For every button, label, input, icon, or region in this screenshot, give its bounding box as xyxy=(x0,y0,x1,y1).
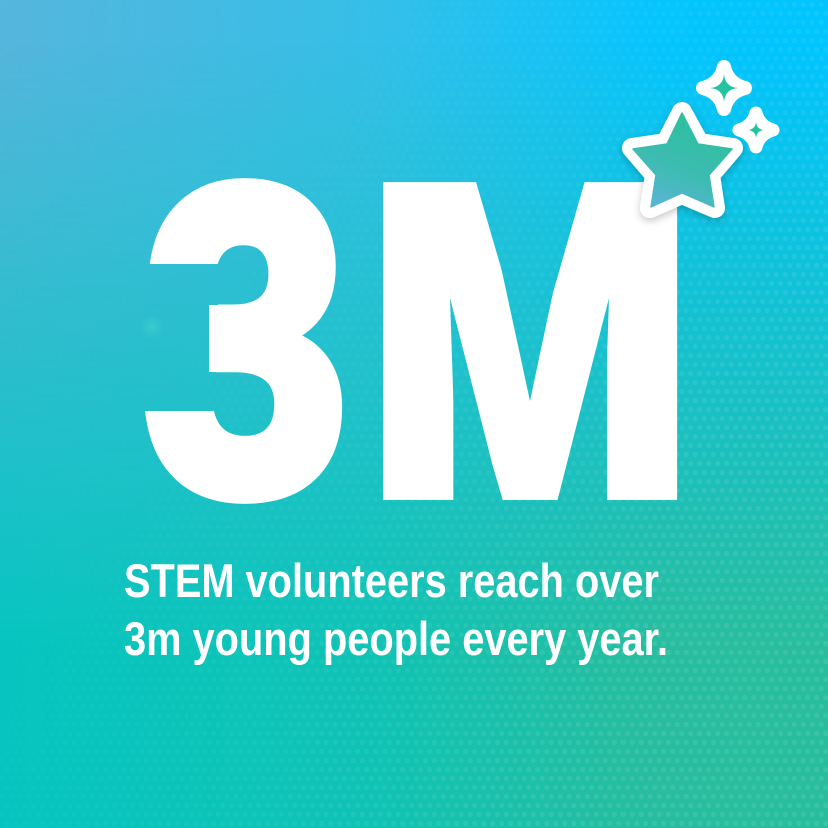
caption line 1: STEM volunteers reach over xyxy=(124,554,659,607)
caption text xyxy=(124,554,668,665)
icon: lower sparkle xyxy=(739,113,773,147)
digit 3: 3 xyxy=(145,100,347,581)
icon: upper sparkle xyxy=(703,67,745,109)
letter M: M xyxy=(367,101,693,581)
icon: large star xyxy=(632,112,733,208)
headline number: 3M xyxy=(145,178,678,504)
icon: star with sparkles xyxy=(632,67,773,208)
caption line 2: 3m young people every year. xyxy=(124,612,668,665)
